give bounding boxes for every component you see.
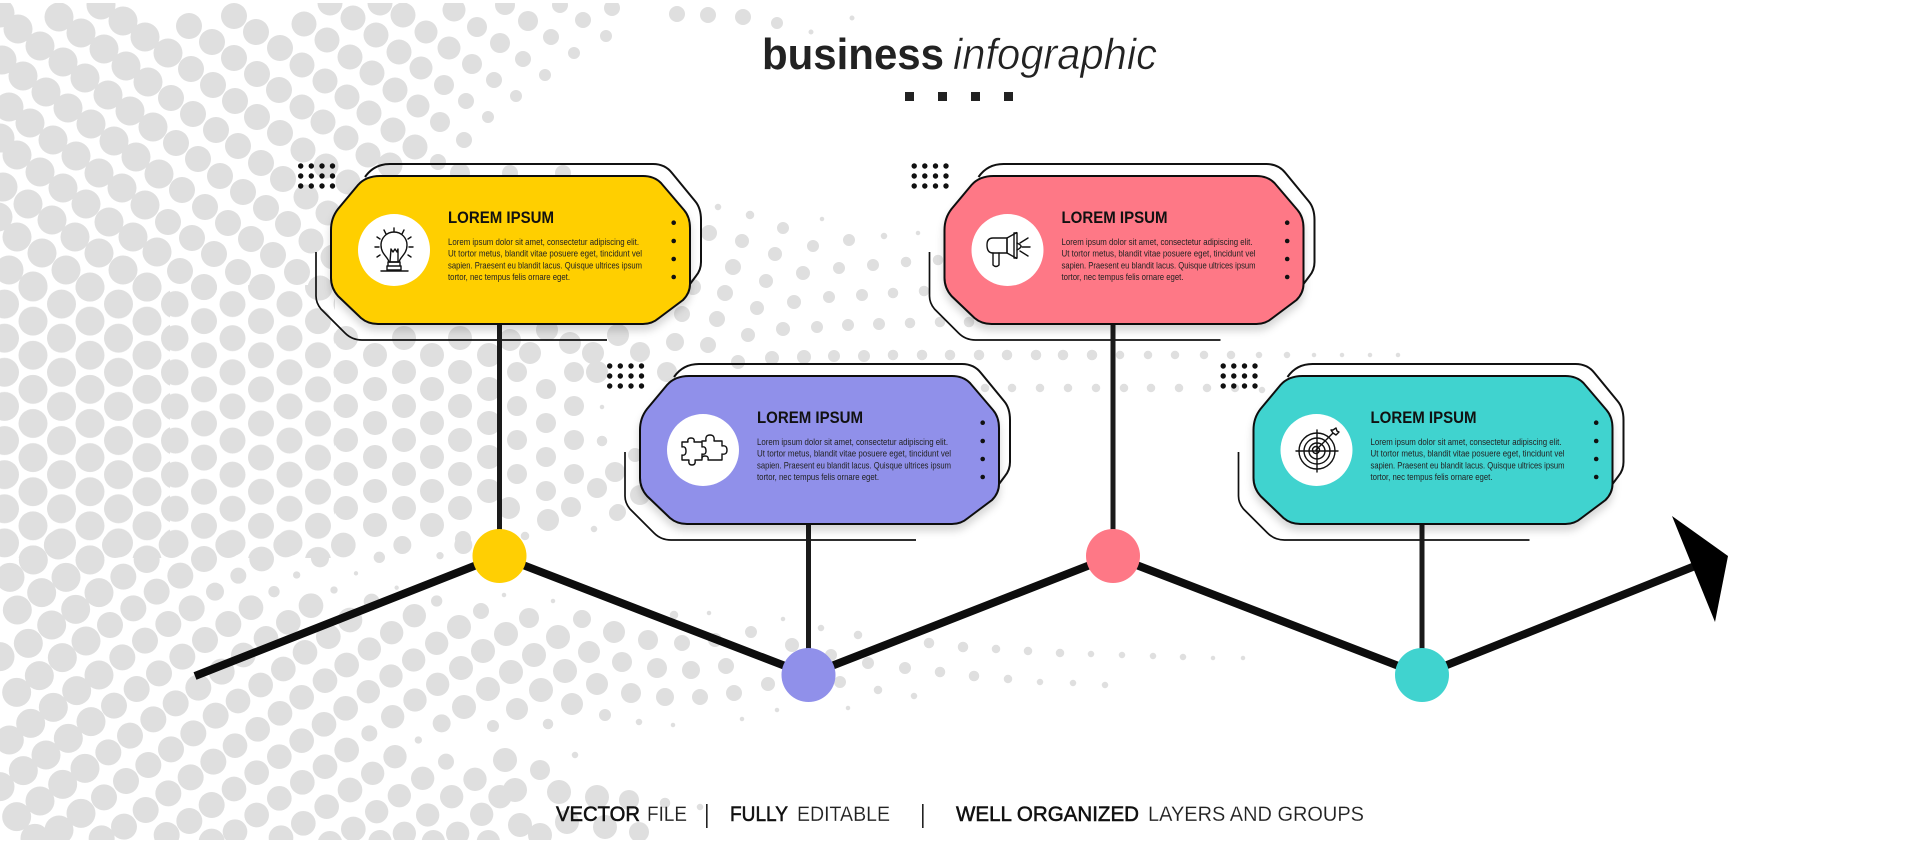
body text: Lorem ipsum dolor sit amet, consectetur adipiscing elit. [1062,236,1252,247]
body text: Lorem ipsum dolor sit amet, consectetur adipiscing elit. [757,436,948,447]
body text [1062,236,1256,282]
title [762,30,1157,79]
body text: tortor, nec tempus felis ornare eget. [448,271,570,282]
panel: step 1 yellow [298,163,701,342]
node: pink [1086,529,1140,583]
node: purple [782,648,836,702]
body text: tortor, nec tempus felis ornare eget. [1370,471,1492,482]
step 4 connector stem [1420,520,1424,675]
step 1 connector stem [497,320,502,556]
body text: sapien. Praesent eu blandit lacus. Quisque ultrices ipsum [757,459,951,470]
icon: puzzle pieces [682,435,727,465]
title: business [762,30,944,79]
icon: megaphone [987,233,1030,266]
body text: tortor, nec tempus felis ornare eget. [757,471,879,482]
footer caption [556,803,1364,828]
body text: Lorem ipsum dolor sit amet, consectetur adipiscing elit. [1370,436,1562,447]
icon: light bulb [375,228,413,271]
body text: Ut tortor metus, blandit vitae posuere eget, tincidunt vel [1062,248,1256,259]
body text [448,236,642,282]
footer caption: FULLY [730,803,788,826]
footer caption: FILE [647,803,687,826]
title: infographic [953,30,1157,79]
footer caption: LAYERS AND GROUPS [1148,803,1364,826]
panel: step 2 purple [607,363,1010,542]
panel: step 4 teal [1220,363,1624,542]
body text: sapien. Praesent eu blandit lacus. Quisque ultrices ipsum [1062,259,1256,270]
panel: step 4 teal: LOREM IPSUM [1370,409,1476,427]
footer caption: WELL ORGANIZED [956,803,1139,826]
panel: step 3 pink [912,163,1314,342]
body text [1370,436,1565,482]
footer caption: EDITABLE [797,803,890,826]
panel: step 2 purple: LOREM IPSUM [757,409,863,427]
timeline arrow line [195,516,1728,676]
node: yellow [472,529,526,583]
body text: sapien. Praesent eu blandit lacus. Quisque ultrices ipsum [1370,459,1565,470]
icon: target with arrow [1296,428,1339,472]
title square markers [905,92,1013,101]
footer caption: VECTOR [556,803,640,826]
body text [757,436,951,482]
panel: step 1 yellow: LOREM IPSUM [448,209,554,227]
body text: Lorem ipsum dolor sit amet, consectetur adipiscing elit. [448,236,639,247]
node: teal [1395,648,1449,702]
body text: sapien. Praesent eu blandit lacus. Quisque ultrices ipsum [448,259,642,270]
body text: tortor, nec tempus felis ornare eget. [1062,271,1184,282]
step 2 connector stem [806,520,811,675]
halftone dot background [0,3,1398,843]
step 3 connector stem [1110,320,1116,556]
body text: Ut tortor metus, blandit vitae posuere eget, tincidunt vel [1370,448,1564,459]
body text: Ut tortor metus, blandit vitae posuere eget, tincidunt vel [757,448,951,459]
panel: step 3 pink: LOREM IPSUM [1062,209,1168,227]
body text: Ut tortor metus, blandit vitae posuere eget, tincidunt vel [448,248,642,259]
